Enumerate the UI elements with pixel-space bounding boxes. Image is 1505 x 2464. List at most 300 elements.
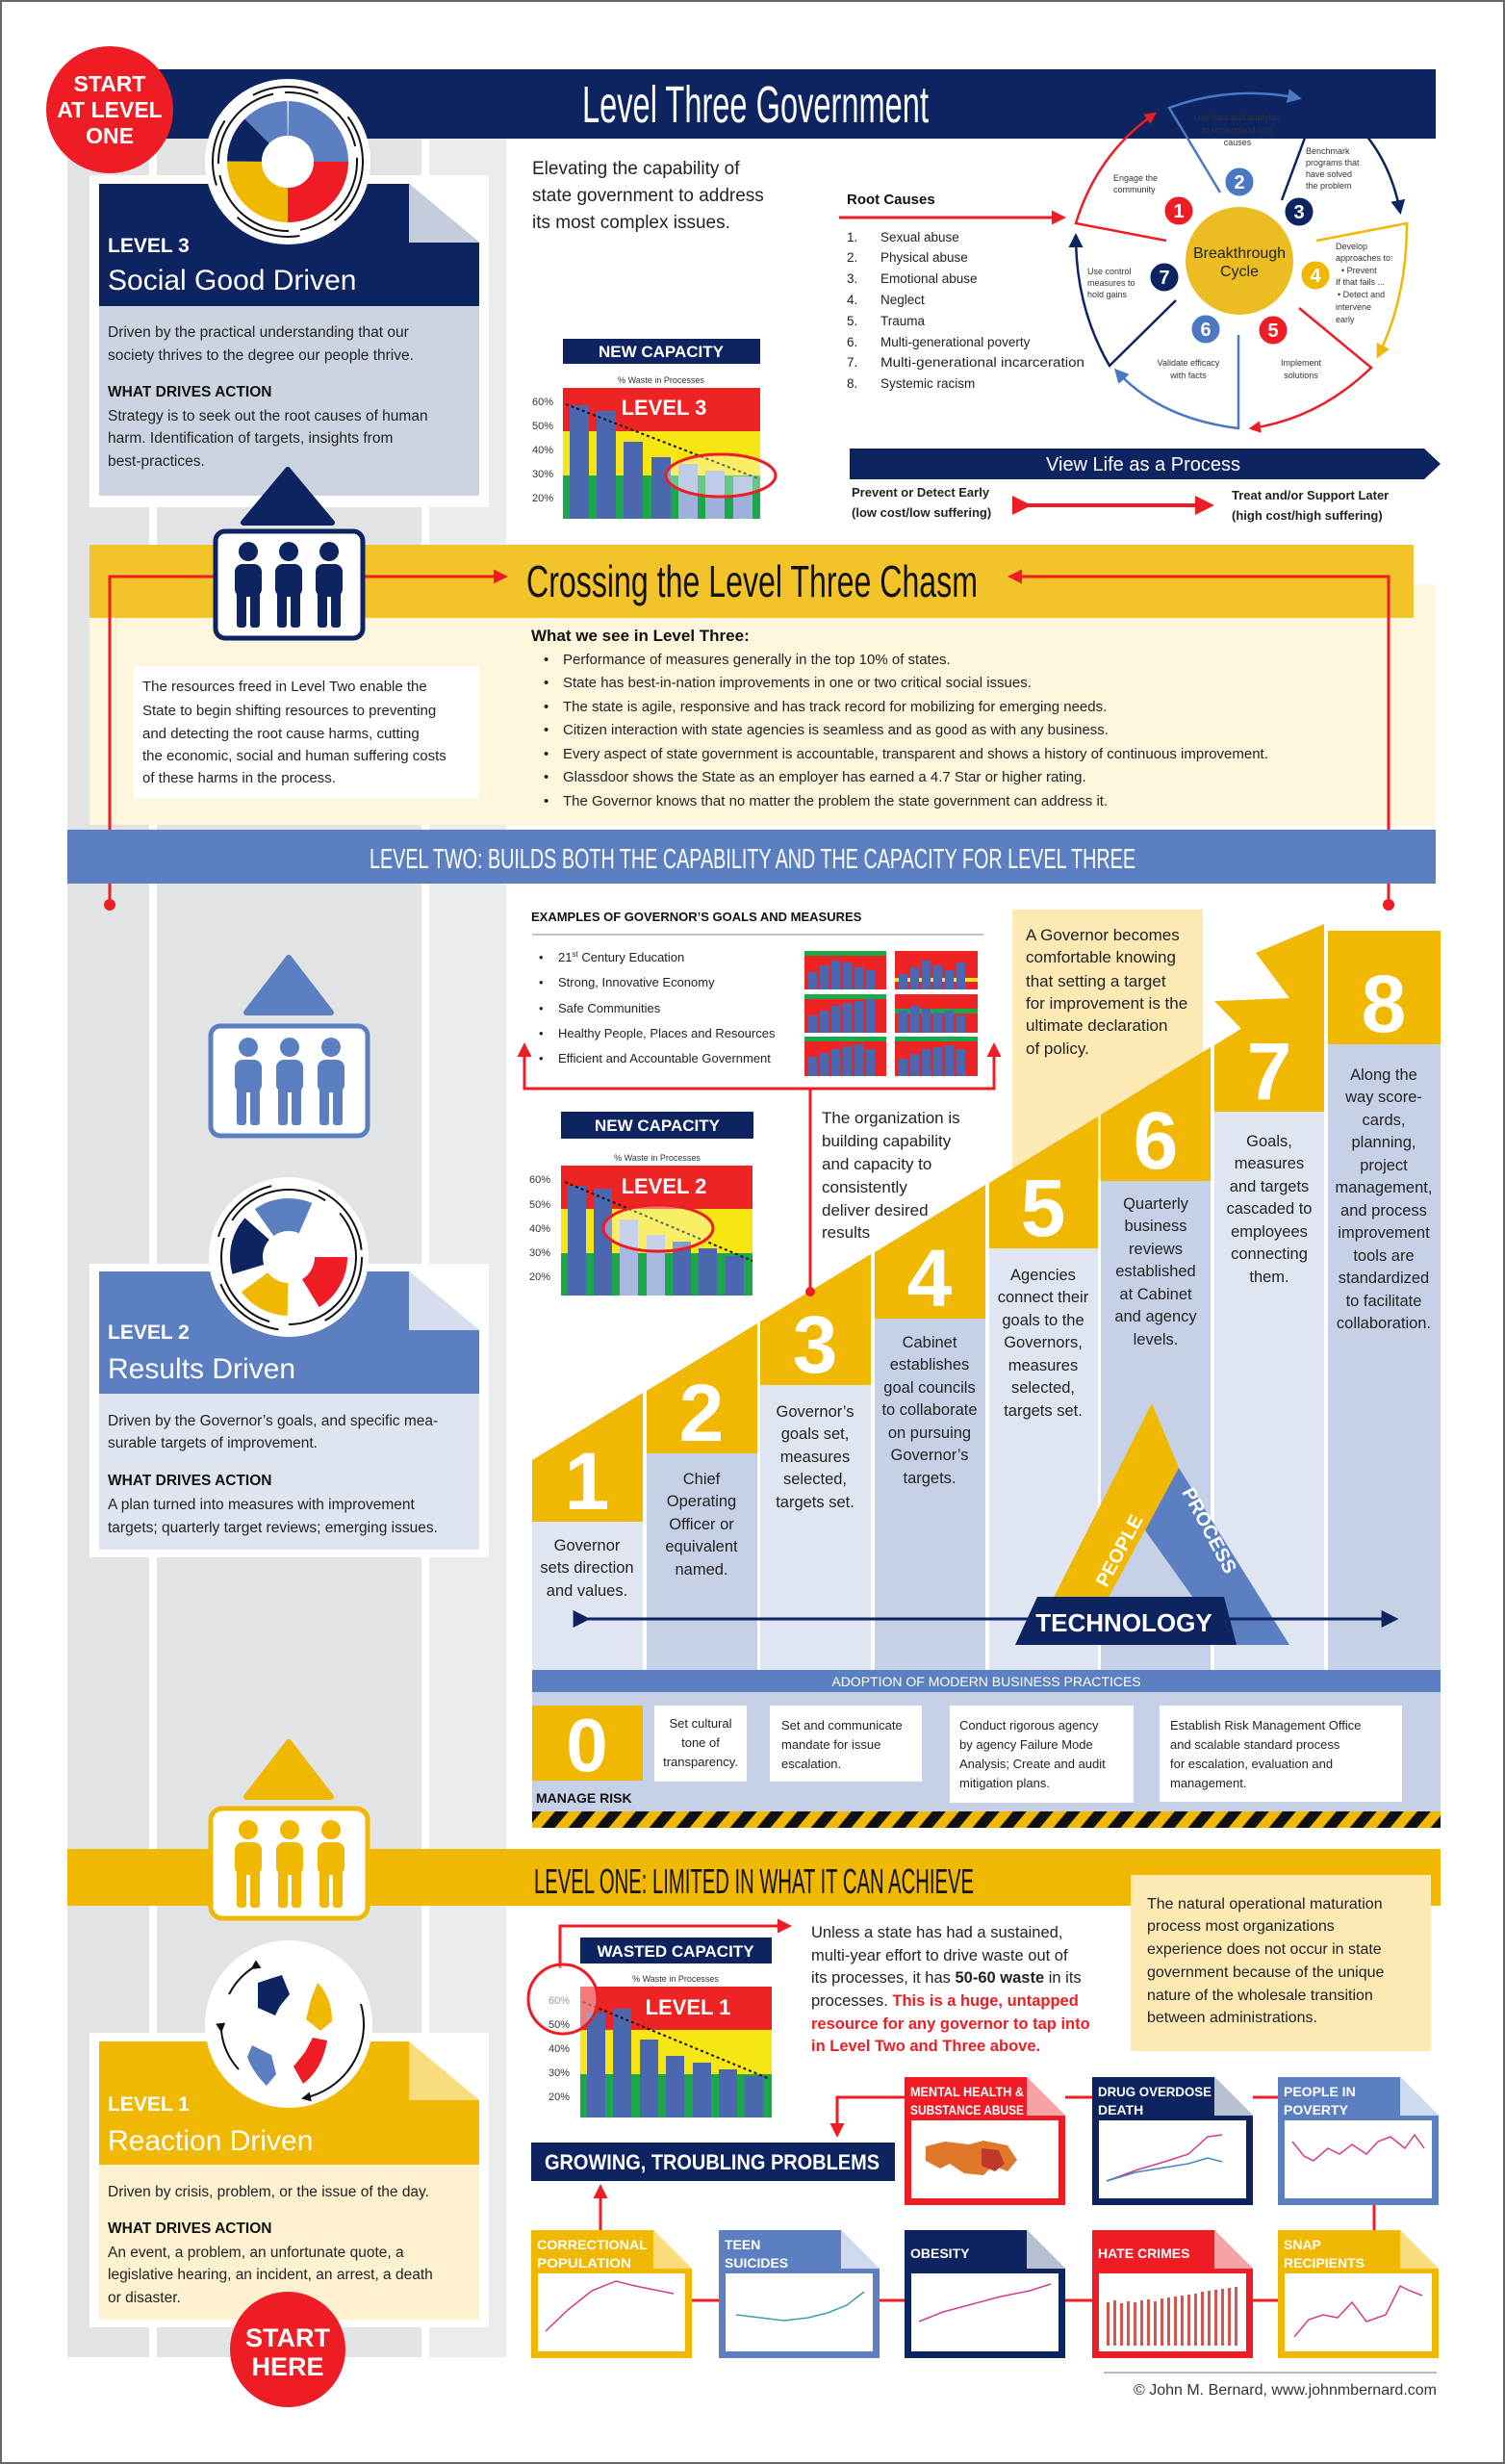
level 2 card: A plan turned into measures with improvement: [108, 1497, 415, 1513]
staircase chart of steps 1-8: Cabinet: [903, 1334, 957, 1351]
root causes list: Neglect: [880, 293, 925, 307]
level 3 card: best-practices.: [108, 453, 205, 470]
problem card: teen suicides: TEEN: [725, 2237, 760, 2252]
staircase chart of steps 1-8: and targets: [1230, 1178, 1309, 1195]
crossing the chasm panel: Every aspect of state government is accountable, transparent and shows a history of continuous improvement.: [563, 746, 1268, 762]
new capacity chart level 2: 60%: [529, 1174, 550, 1186]
staircase chart of steps 1-8: reviews: [1129, 1241, 1183, 1258]
staircase chart of steps 1-8: connect their: [998, 1289, 1089, 1306]
breakthrough cycle diagram: Use control: [1087, 267, 1132, 276]
staircase chart of steps 1-8: establishes: [890, 1356, 969, 1373]
copyright: © John M. Bernard, www.johnmbernard.com: [1134, 2382, 1437, 2399]
icon: puzzle cycle level 1: [205, 1940, 372, 2108]
organization text with connector: consistently: [822, 1178, 907, 1196]
organization text with connector: results: [822, 1223, 870, 1242]
breakthrough cycle diagram: intervene: [1336, 302, 1371, 312]
view life as a process bar: Treat and/or Support Later: [1232, 488, 1389, 502]
staircase chart of steps 1-8: cascaded to: [1227, 1200, 1312, 1218]
breakthrough cycle diagram: 5: [1267, 321, 1279, 342]
breakthrough cycle diagram: 3: [1293, 202, 1305, 223]
new capacity chart level 2: NEW CAPACITY: [595, 1116, 721, 1135]
level 2 card: Driven by the Governor’s goals, and specific mea-: [108, 1413, 438, 1429]
wasted capacity chart level 1: % Waste in Processes: [632, 1974, 719, 1984]
staircase chart of steps 1-8: Goals,: [1246, 1133, 1292, 1150]
adoption of modern business practices: mitigation plans.: [959, 1776, 1050, 1790]
examples of governor's goals: •: [539, 1051, 544, 1065]
root causes list: 6.: [847, 335, 857, 349]
crossing the chasm panel: The Governor knows that no matter the problem the state government can address it.: [563, 793, 1108, 809]
badge: start here: [230, 2292, 345, 2407]
examples of governor's goals: •: [539, 950, 544, 964]
staircase chart of steps 1-8: Governor’s: [890, 1447, 969, 1464]
level 3 card: Social Good Driven: [108, 265, 356, 296]
breakthrough cycle diagram: [1076, 93, 1407, 428]
breakthrough cycle diagram: with facts: [1169, 371, 1207, 380]
adoption of modern business practices: Analysis; Create and audit: [959, 1757, 1106, 1771]
problem card: correctional population: POPULATION: [537, 2255, 631, 2271]
staircase chart of steps 1-8: goals to the: [1002, 1312, 1084, 1329]
people process technology triangle: TECHNOLOGY: [1035, 1608, 1212, 1637]
level two band: [67, 830, 1436, 884]
staircase chart of steps 1-8: 5: [1021, 1163, 1065, 1253]
staircase chart of steps 1-8: management,: [1336, 1179, 1432, 1196]
crossing the chasm panel: Performance of measures generally in the top 10% of states.: [563, 652, 951, 668]
problem card: mental health: SUBSTANCE ABUSE: [910, 2102, 1024, 2118]
callout: natural maturation: [1131, 1875, 1431, 2051]
crossing the chasm panel: State has best-in-nation improvements in one or two critical social issues.: [563, 675, 1032, 691]
badge: start at level one: AT LEVEL: [57, 97, 163, 122]
examples of governor's goals: Century Education: [578, 950, 684, 964]
new capacity chart level 3: NEW CAPACITY: [599, 343, 725, 361]
root causes list: Systemic racism: [880, 376, 975, 391]
intro text: [532, 159, 764, 233]
breakthrough cycle diagram: Engage the: [1113, 173, 1158, 183]
header bar: Level Three Government: [157, 69, 1436, 139]
staircase chart of steps 1-8: 1: [565, 1436, 609, 1527]
breakthrough cycle diagram: 7: [1159, 268, 1170, 289]
staircase chart of steps 1-8: comfortable knowing: [1026, 948, 1176, 966]
new capacity chart level 2: LEVEL 2: [622, 1174, 706, 1198]
breakthrough cycle diagram: 2: [1234, 172, 1245, 193]
staircase chart of steps 1-8: 8: [1362, 959, 1406, 1049]
new capacity chart level 3: LEVEL 3: [622, 396, 706, 420]
staircase chart of steps 1-8: Officer or: [669, 1516, 734, 1533]
view life as a process bar: [850, 449, 1441, 523]
root causes list: 2.: [847, 250, 857, 265]
staircase chart of steps 1-8: to facilitate: [1346, 1293, 1421, 1310]
crossing the chasm panel: •: [544, 746, 548, 762]
staircase chart of steps 1-8: Agencies: [1010, 1267, 1076, 1284]
growing troubling problems box: [531, 2143, 895, 2181]
people process technology triangle: PEOPLE: [1092, 1511, 1148, 1590]
problem card: drug overdose: DEATH: [1098, 2102, 1143, 2118]
level one paragraph: [811, 1924, 1090, 2055]
staircase chart of steps 1-8: [532, 910, 1441, 1670]
problem card: people in poverty: PEOPLE IN: [1284, 2084, 1356, 2099]
adoption of modern business practices: Conduct rigorous agency: [959, 1718, 1099, 1732]
staircase chart of steps 1-8: them.: [1249, 1269, 1289, 1286]
problem card: teen suicides: SUICIDES: [725, 2255, 788, 2271]
new capacity chart level 3: [532, 339, 776, 519]
staircase chart of steps 1-8: ultimate declaration: [1026, 1016, 1167, 1035]
staircase chart of steps 1-8: targets set.: [1004, 1402, 1083, 1420]
level two band: LEVEL TWO: BUILDS BOTH THE CAPABILITY AND THE CAPACITY FOR LEVEL THREE: [370, 844, 1135, 875]
level 3 card: Strategy is to seek out the root causes of human: [108, 408, 428, 424]
staircase chart of steps 1-8: business: [1124, 1218, 1187, 1235]
staircase chart of steps 1-8: established: [1115, 1263, 1196, 1280]
breakthrough cycle diagram: programs that: [1306, 158, 1360, 167]
arrow up and people icon level 3: [216, 470, 363, 638]
examples of governor's goals: Strong, Innovative Economy: [558, 975, 715, 989]
problem card: hate crimes: [1092, 2230, 1253, 2358]
breakthrough cycle diagram: have solved: [1306, 169, 1352, 179]
breakthrough cycle diagram: hold gains: [1087, 290, 1128, 299]
crossing the chasm panel: •: [544, 652, 548, 668]
new capacity chart level 2: 40%: [529, 1223, 550, 1235]
staircase chart of steps 1-8: at Cabinet: [1119, 1286, 1192, 1303]
adoption of modern business practices: escalation.: [781, 1757, 841, 1771]
staircase chart of steps 1-8: goal councils: [883, 1379, 976, 1397]
breakthrough cycle diagram: Benchmark: [1306, 146, 1350, 156]
crossing the chasm panel: •: [544, 675, 548, 691]
staircase chart of steps 1-8: way score-: [1344, 1089, 1422, 1106]
badge: start here: HERE: [251, 2352, 324, 2381]
root causes list: 3.: [847, 271, 857, 286]
level 3 card: WHAT DRIVES ACTION: [108, 384, 271, 400]
root causes list: Root Causes: [847, 192, 935, 208]
problem card: obesity: OBESITY: [910, 2246, 970, 2261]
intro text: state government to address: [532, 186, 764, 206]
root causes list: Physical abuse: [880, 250, 968, 265]
staircase chart of steps 1-8: Along the: [1350, 1066, 1417, 1084]
staircase chart of steps 1-8: goals set,: [781, 1425, 849, 1443]
staircase chart of steps 1-8: cards,: [1363, 1112, 1405, 1129]
callout: natural maturation: nature of the wholesale transition: [1147, 1988, 1373, 2004]
examples of governor's goals: Healthy People, Places and Resources: [558, 1026, 776, 1040]
staircase chart of steps 1-8: project: [1360, 1157, 1408, 1174]
breakthrough cycle diagram: the problem: [1306, 181, 1352, 191]
crossing the chasm panel: the economic, social and human suffering costs: [142, 748, 446, 764]
breakthrough cycle diagram: to understand root: [1202, 125, 1273, 135]
adoption of modern business practices: and scalable standard process: [1170, 1737, 1340, 1752]
adoption of modern business practices: ADOPTION OF MODERN BUSINESS PRACTICES: [831, 1674, 1141, 1689]
adoption of modern business practices: management.: [1170, 1776, 1247, 1790]
adoption of modern business practices: for escalation, evaluation and: [1170, 1757, 1333, 1771]
root causes list: 5.: [847, 314, 857, 328]
problem card: correctional population: [531, 2230, 692, 2358]
examples of governor's goals: [524, 910, 994, 1089]
staircase chart of steps 1-8: levels.: [1134, 1331, 1178, 1348]
crossing the chasm panel: What we see in Level Three:: [531, 627, 750, 645]
staircase chart of steps 1-8: employees: [1231, 1223, 1308, 1241]
level 1 card: Driven by crisis, problem, or the issue of the day.: [108, 2184, 429, 2200]
root causes list: Multi-generational poverty: [880, 335, 1031, 349]
level 2 card: targets; quarterly target reviews; emerging issues.: [108, 1520, 438, 1536]
growing troubling problems box: GROWING, TROUBLING PROBLEMS: [545, 2150, 880, 2174]
problem card: drug overdose: [1092, 2077, 1253, 2205]
adoption of modern business practices: MANAGE RISK: [536, 1790, 632, 1806]
callout: natural maturation: The natural operational maturation: [1147, 1896, 1383, 1912]
breakthrough cycle diagram: Use data and analytics: [1193, 113, 1282, 122]
staircase chart of steps 1-8: measures: [780, 1449, 850, 1466]
level 3 card: society thrives to the degree our people thrive.: [108, 347, 414, 364]
wasted capacity chart level 1: 30%: [548, 2067, 570, 2079]
view life as a process bar: View Life as a Process: [1046, 454, 1240, 475]
staircase chart of steps 1-8: of policy.: [1026, 1040, 1089, 1058]
organization text with connector: and capacity to: [822, 1155, 931, 1173]
breakthrough cycle diagram: Validate efficacy: [1158, 358, 1220, 368]
view life as a process bar: (high cost/high suffering): [1232, 508, 1383, 523]
new capacity chart level 2: 20%: [529, 1271, 550, 1283]
view life as a process bar: Prevent or Detect Early: [852, 485, 990, 500]
staircase chart of steps 1-8: A Governor becomes: [1026, 926, 1180, 944]
examples of governor's goals: •: [539, 1001, 544, 1015]
staircase chart of steps 1-8: Quarterly: [1123, 1195, 1189, 1213]
root causes list: 4.: [847, 293, 857, 307]
crossing the chasm panel: and detecting the root cause harms, cutting: [142, 726, 420, 742]
organization text with connector: [805, 1089, 960, 1296]
crossing the chasm panel: Crossing the Level Three Chasm: [526, 556, 978, 606]
root causes list: [839, 192, 1084, 391]
crossing the chasm panel: •: [544, 699, 548, 715]
staircase chart of steps 1-8: measures: [1235, 1155, 1304, 1172]
level 2 card: [89, 1264, 489, 1557]
staircase chart of steps 1-8: sets direction: [540, 1559, 634, 1577]
staircase chart of steps 1-8: 6: [1134, 1095, 1178, 1186]
badge: start at level one: ONE: [86, 123, 134, 148]
organization text with connector: deliver desired: [822, 1201, 929, 1219]
breakthrough cycle diagram: 6: [1200, 320, 1212, 341]
wasted capacity chart level 1: WASTED CAPACITY: [597, 1942, 754, 1961]
crossing the chasm panel: •: [544, 793, 548, 809]
breakthrough cycle diagram: measures to: [1087, 278, 1135, 288]
crossing the chasm panel: Glassdoor shows the State as an employer has earned a 4.7 Star or higher rating.: [563, 769, 1086, 785]
wasted capacity chart level 1: [528, 1926, 789, 2118]
staircase chart of steps 1-8: Governor: [554, 1537, 621, 1554]
new capacity chart level 3: 60%: [532, 397, 553, 408]
badge: start here: START: [245, 2323, 330, 2352]
level 1 card: WHAT DRIVES ACTION: [108, 2220, 271, 2237]
wasted capacity chart level 1: 20%: [548, 2092, 570, 2103]
crossing the chasm panel: [89, 545, 1436, 911]
problem card: snap recipients: SNAP: [1284, 2237, 1321, 2252]
staircase chart of steps 1-8: Governor’s: [776, 1403, 855, 1421]
arrow up and people icon level 2: [211, 958, 368, 1136]
breakthrough cycle diagram: If that fails ...: [1336, 277, 1385, 287]
staircase chart of steps 1-8: that setting a target: [1026, 972, 1166, 990]
new capacity chart level 3: 50%: [532, 421, 553, 432]
staircase chart of steps 1-8: equivalent: [665, 1538, 738, 1555]
adoption of modern business practices: Establish Risk Management Office: [1170, 1718, 1361, 1732]
problem card: hate crimes: HATE CRIMES: [1098, 2246, 1189, 2261]
root causes list: Multi-generational incarceration: [880, 355, 1084, 370]
staircase chart of steps 1-8: selected,: [1011, 1379, 1075, 1397]
level 2 card: WHAT DRIVES ACTION: [108, 1473, 271, 1489]
adoption of modern business practices: [532, 1670, 1441, 1811]
crossing the chasm panel: •: [544, 722, 548, 738]
root causes list: 7.: [847, 355, 857, 370]
breakthrough cycle diagram: approaches to:: [1336, 253, 1393, 263]
examples of governor's goals: 21: [558, 950, 572, 964]
level 1 card: [89, 2033, 489, 2327]
level 1 card: legislative hearing, an incident, an arrest, a death: [108, 2267, 433, 2283]
problem card: correctional population: CORRECTIONAL: [537, 2237, 648, 2252]
crossing the chasm panel: Citizen interaction with state agencies is seamless and as good as with any business.: [563, 722, 1109, 738]
staircase chart of steps 1-8: collaboration.: [1337, 1315, 1431, 1332]
level 2 card: Results Driven: [108, 1353, 295, 1385]
level one band: [67, 1849, 1441, 1906]
organization text with connector: The organization is: [822, 1109, 960, 1127]
level 1 card: or disaster.: [108, 2290, 181, 2306]
new capacity chart level 3: 40%: [532, 445, 553, 456]
breakthrough cycle diagram: 4: [1310, 266, 1321, 287]
problem card: people in poverty: [1278, 2077, 1439, 2205]
level one paragraph: multi-year effort to drive waste out of: [811, 1947, 1068, 1964]
new capacity chart level 3: 30%: [532, 469, 553, 480]
people process technology triangle: PROCESS: [1178, 1484, 1240, 1578]
level 3 card: Driven by the practical understanding that our: [108, 324, 409, 341]
breakthrough cycle diagram: 1: [1173, 201, 1185, 222]
staircase chart of steps 1-8: selected,: [783, 1471, 847, 1488]
problem card: mental health: MENTAL HEALTH &: [910, 2084, 1024, 2099]
breakthrough cycle diagram: early: [1336, 315, 1355, 324]
new capacity chart level 2: 30%: [529, 1247, 550, 1259]
wasted capacity chart level 1: 60%: [548, 1995, 570, 2007]
breakthrough cycle diagram: Cycle: [1220, 264, 1259, 280]
staircase chart of steps 1-8: Operating: [667, 1493, 736, 1510]
problem card: snap recipients: [1278, 2230, 1439, 2358]
problem card: people in poverty: POVERTY: [1284, 2102, 1349, 2118]
breakthrough cycle diagram: Implement: [1281, 358, 1322, 368]
crossing the chasm panel: State to begin shifting resources to preventing: [142, 703, 436, 719]
examples of governor's goals: EXAMPLES OF GOVERNOR’S GOALS AND MEASURES: [531, 910, 862, 924]
level 2 card: LEVEL 2: [108, 1322, 190, 1344]
people process technology triangle: [587, 1403, 1395, 1645]
staircase chart of steps 1-8: measures: [1008, 1357, 1078, 1374]
staircase chart of steps 1-8: planning,: [1352, 1134, 1416, 1151]
icon: puzzle cycle level 3: [205, 79, 370, 244]
staircase chart of steps 1-8: 3: [793, 1299, 837, 1390]
problem card: obesity: [905, 2230, 1065, 2358]
adoption of modern business practices: Set cultural: [669, 1716, 732, 1731]
problem card: drug overdose: DRUG OVERDOSE: [1098, 2084, 1212, 2099]
staircase chart of steps 1-8: and values.: [547, 1582, 627, 1600]
staircase chart of steps 1-8: Chief: [683, 1471, 721, 1488]
examples of governor's goals: Safe Communities: [558, 1001, 661, 1015]
staircase chart of steps 1-8: targets set.: [776, 1494, 855, 1511]
staircase chart of steps 1-8: 4: [907, 1233, 953, 1323]
problem card: teen suicides: [719, 2230, 880, 2358]
new capacity chart level 2: 50%: [529, 1199, 550, 1211]
crossing the chasm panel: The resources freed in Level Two enable the: [142, 679, 427, 695]
intro text: Elevating the capability of: [532, 159, 740, 179]
wasted capacity chart level 1: LEVEL 1: [646, 1995, 730, 2019]
breakthrough cycle diagram: Develop: [1336, 242, 1367, 251]
breakthrough cycle diagram: causes: [1224, 138, 1252, 147]
hazard stripe: [532, 1811, 1441, 1828]
callout: natural maturation: experience does not occur in state: [1147, 1941, 1382, 1958]
staircase chart of steps 1-8: 2: [679, 1368, 724, 1458]
problem card: mental health: [905, 2077, 1065, 2205]
adoption of modern business practices: transparency.: [663, 1755, 738, 1769]
icon: puzzle cycle level 2: [209, 1177, 369, 1337]
badge: start at level one: [46, 46, 173, 173]
breakthrough cycle diagram: • Prevent: [1341, 266, 1377, 275]
new capacity chart level 3: % Waste in Processes: [618, 375, 704, 385]
breakthrough cycle diagram: • Detect and: [1338, 290, 1385, 299]
level one paragraph: in Level Two and Three above.: [811, 2038, 1040, 2055]
examples of governor's goals: Efficient and Accountable Government: [558, 1051, 771, 1065]
callout: natural maturation: between administrations.: [1147, 2010, 1317, 2026]
new capacity chart level 2: [529, 1112, 753, 1296]
staircase chart of steps 1-8: named.: [675, 1561, 728, 1578]
examples of governor's goals: •: [539, 1026, 544, 1040]
intro text: its most complex issues.: [532, 213, 730, 233]
root causes list: 1.: [847, 230, 857, 244]
level 3 card: [89, 175, 489, 507]
left road column: [67, 139, 506, 2357]
staircase chart of steps 1-8: standardized: [1339, 1270, 1429, 1287]
adoption of modern business practices: mandate for issue: [781, 1737, 880, 1752]
level one paragraph: resource for any governor to tap into: [811, 2015, 1090, 2033]
staircase chart of steps 1-8: 7: [1247, 1026, 1291, 1116]
badge: start at level one: START: [74, 71, 145, 96]
staircase chart of steps 1-8: targets.: [903, 1470, 957, 1487]
adoption of modern business practices: 0: [566, 1703, 608, 1787]
breakthrough cycle diagram: Breakthrough: [1193, 245, 1286, 262]
callout: natural maturation: government because of the unique: [1147, 1964, 1384, 1981]
organization text with connector: building capability: [822, 1132, 952, 1150]
staircase chart of steps 1-8: connecting: [1231, 1245, 1308, 1263]
breakthrough cycle diagram: solutions: [1284, 371, 1318, 380]
staircase chart of steps 1-8: Governors,: [1004, 1334, 1083, 1351]
crossing the chasm panel: of these harms in the process.: [142, 770, 336, 786]
staircase chart of steps 1-8: and process: [1340, 1202, 1427, 1219]
level one paragraph: processes. This is a huge, untapped: [811, 1992, 1079, 2010]
adoption of modern business practices: by agency Failure Mode: [959, 1737, 1093, 1752]
staircase chart of steps 1-8: for improvement is the: [1026, 994, 1187, 1013]
connector lines for problems: [531, 2097, 1439, 2300]
new capacity chart level 3: 20%: [532, 493, 553, 504]
level 1 card: An event, a problem, an unfortunate quote, a: [108, 2245, 404, 2261]
root causes list: Emotional abuse: [880, 271, 978, 286]
level one paragraph: Unless a state has had a sustained,: [811, 1924, 1062, 1941]
examples of governor's goals: •: [539, 975, 544, 989]
level 3 card: LEVEL 3: [108, 235, 190, 257]
wasted capacity chart level 1: 40%: [548, 2043, 570, 2055]
staircase chart of steps 1-8: to collaborate: [881, 1401, 978, 1419]
adoption of modern business practices: Set and communicate: [781, 1718, 903, 1732]
view life as a process bar: (low cost/low suffering): [852, 505, 991, 520]
staircase chart of steps 1-8: improvement: [1338, 1224, 1430, 1242]
staircase chart of steps 1-8: on pursuing: [888, 1424, 971, 1442]
breakthrough cycle diagram: community: [1113, 185, 1156, 194]
level 2 card: surable targets of improvement.: [108, 1435, 318, 1451]
header bar: Level Three Government: Level Three Government: [582, 76, 929, 134]
level one paragraph: its processes, it has 50-60 waste in its: [811, 1969, 1082, 1987]
callout: natural maturation: process most organizations: [1147, 1918, 1335, 1935]
examples of governor's goals: st: [572, 950, 578, 959]
level 1 card: Reaction Driven: [108, 2125, 313, 2157]
root causes list: 8.: [847, 376, 857, 391]
level one band: LEVEL ONE: LIMITED IN WHAT IT CAN ACHIEVE: [534, 1861, 974, 1901]
new capacity chart level 2: % Waste in Processes: [614, 1153, 701, 1163]
problem card: snap recipients: RECIPIENTS: [1284, 2255, 1365, 2271]
level 1 card: LEVEL 1: [108, 2093, 190, 2116]
root causes list: Sexual abuse: [880, 230, 959, 244]
crossing the chasm panel: The state is agile, responsive and has track record for mobilizing for emerging needs.: [563, 699, 1107, 715]
wasted capacity chart level 1: 50%: [548, 2019, 570, 2031]
